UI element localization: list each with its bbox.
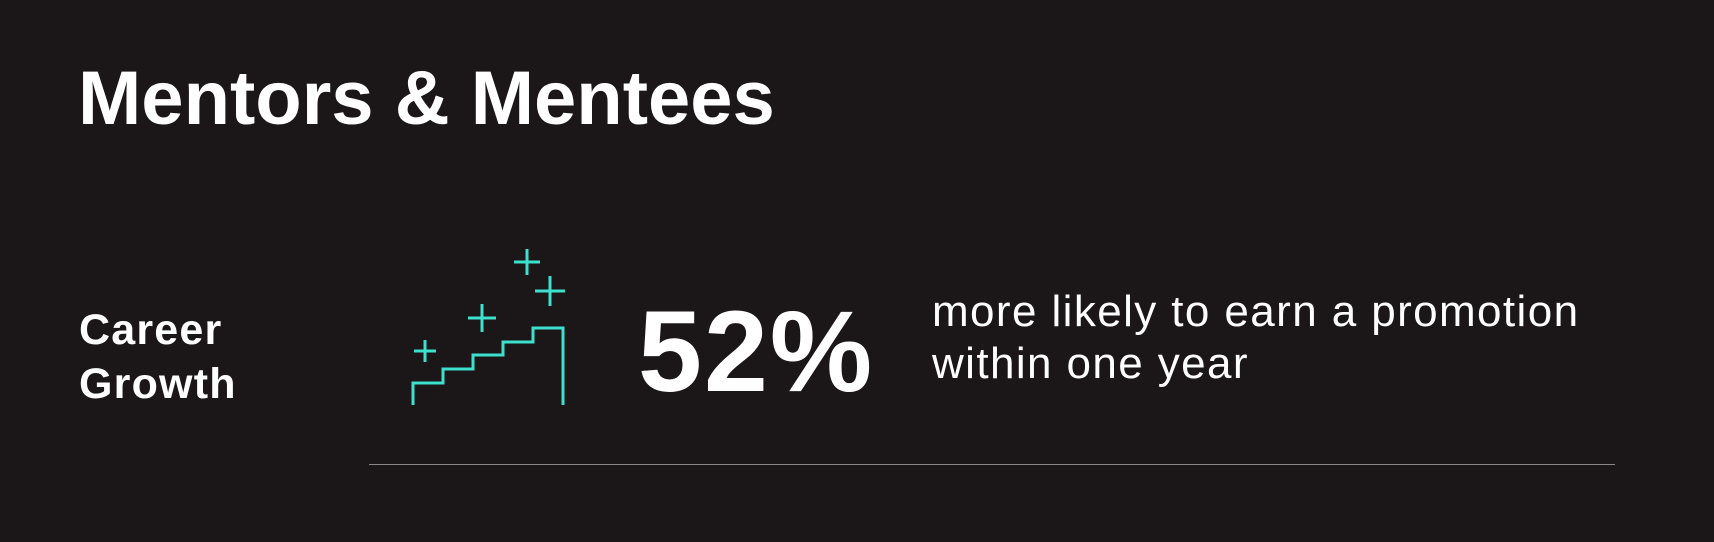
category label (79, 306, 237, 408)
title: Mentors & Mentees (78, 56, 775, 141)
description: within one year (932, 339, 1249, 388)
description: more likely to earn a promotion (932, 287, 1579, 336)
icon: stairs with sparkles (412, 249, 565, 405)
category label: Career (79, 306, 222, 354)
description (932, 287, 1579, 388)
category label: Growth (79, 360, 237, 408)
statistic: 52% (638, 288, 874, 416)
